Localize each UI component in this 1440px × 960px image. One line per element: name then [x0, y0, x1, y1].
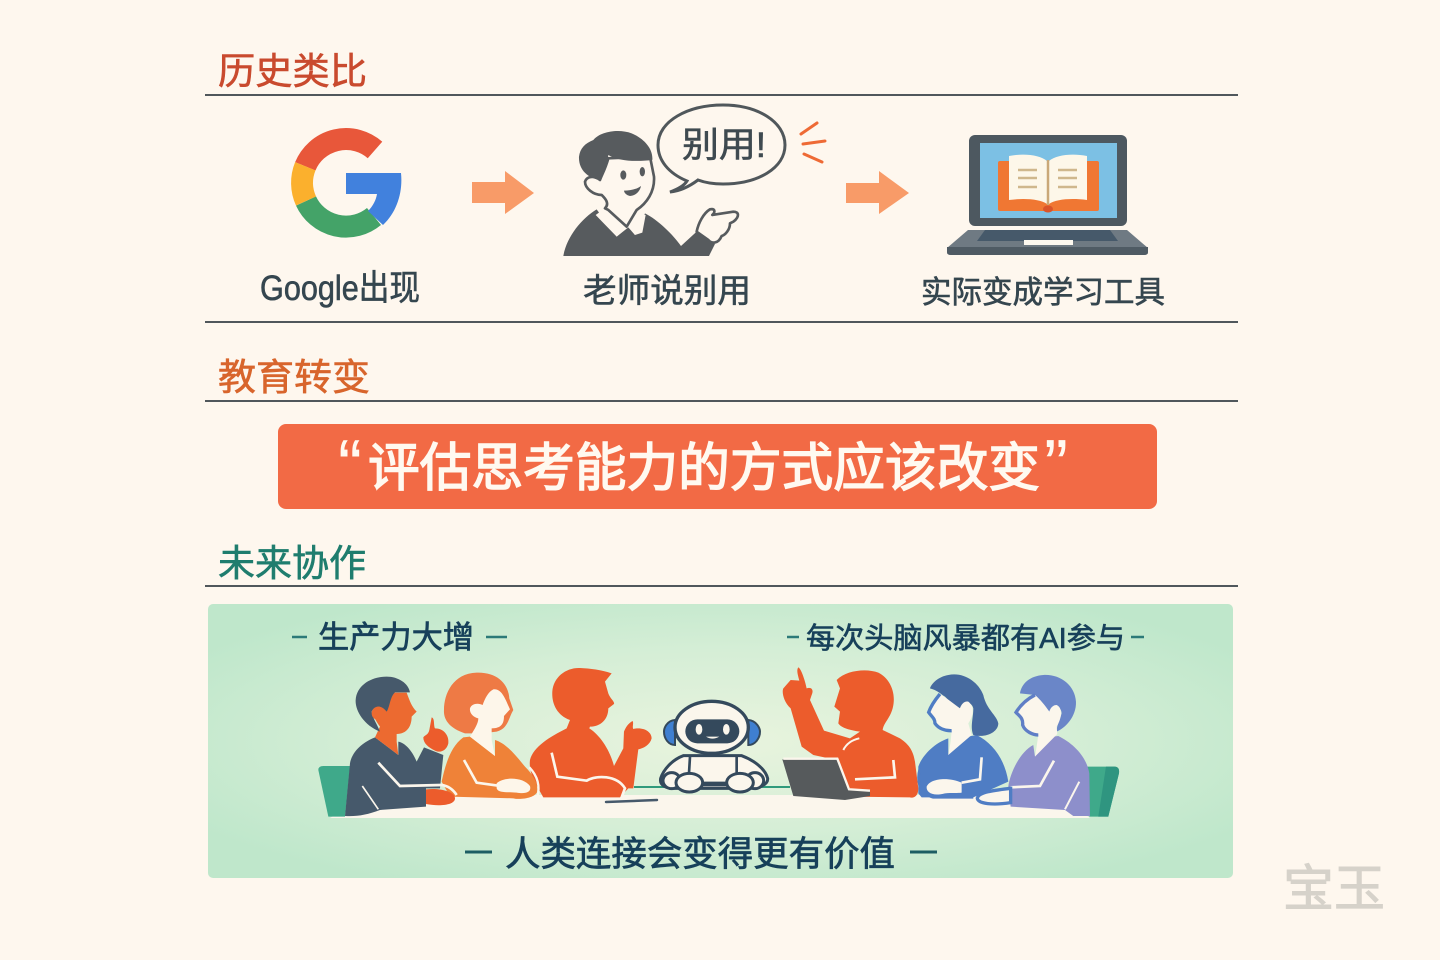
heading: 教育转变: 教育转变: [218, 357, 370, 398]
heading: 未来协作: 未来协作: [218, 543, 366, 584]
icon: Google G logo: [302, 139, 401, 227]
label: 每次头脑风暴都有AI参与: 每次头脑风暴都有AI参与: [806, 622, 1125, 655]
robot: [660, 701, 768, 792]
heading: 历史类比: 历史类比: [218, 51, 367, 92]
label: 生产力大增: 生产力大增: [318, 620, 474, 655]
arrow: teacher to laptop: [846, 171, 909, 214]
watermark: 宝玉: [1283, 861, 1385, 917]
speech bubble: [658, 105, 785, 192]
person 6: purple: [977, 675, 1119, 817]
emphasis marks: [801, 123, 825, 162]
book: [998, 155, 1099, 212]
people left of robot: [318, 668, 652, 817]
person 4: orange-red man with raised arm: [783, 667, 918, 798]
teacher figure: [563, 131, 738, 256]
arrow: Google to teacher: [472, 171, 534, 214]
label: 人类连接会变得更有价值: 人类连接会变得更有价值: [505, 835, 895, 874]
person 2: orange woman: [442, 673, 538, 799]
bubble text: 别用!: [682, 126, 766, 165]
banner text: ”: [1044, 426, 1068, 506]
icon: laptop with open book: [947, 135, 1148, 255]
label: Google出现: Google出现: [260, 269, 420, 308]
banner text: [338, 426, 1068, 506]
meeting table: [330, 795, 1090, 818]
person 5: blue woman: [918, 674, 1008, 797]
banner: quote: [278, 424, 1157, 509]
person 1: dark sweater man with chair: [318, 677, 457, 817]
label: 实际变成学习工具: 实际变成学习工具: [921, 275, 1165, 310]
icon: teacher with speech bubble: [563, 105, 825, 256]
banner text: 评估思考能力的方式应该改变: [368, 440, 1040, 498]
banner text: “: [338, 426, 362, 506]
laptop on table: [782, 759, 870, 800]
person 3: orange-red man: [530, 668, 652, 797]
panel: future collaboration: [208, 604, 1233, 878]
label: 老师说别用: 老师说别用: [583, 272, 751, 309]
people right of robot: [782, 667, 1119, 817]
